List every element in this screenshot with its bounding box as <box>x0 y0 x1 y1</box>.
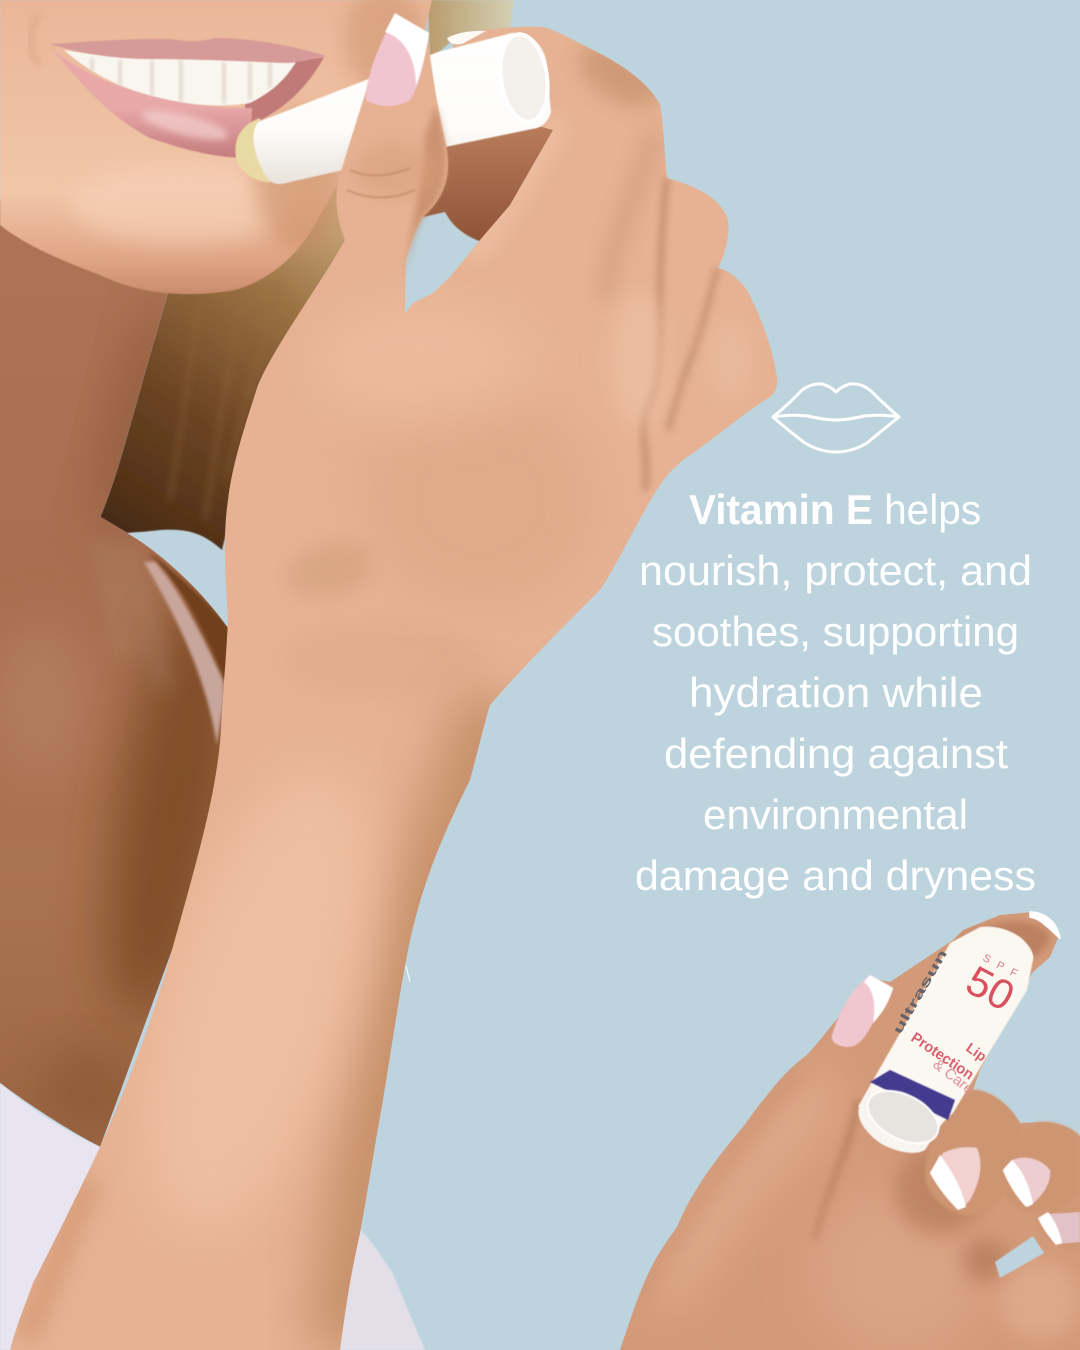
body text: nourish, protect, and <box>639 547 1032 594</box>
smile: lips and teeth <box>50 38 326 158</box>
body text <box>635 486 1036 899</box>
lip balm stick <box>235 31 553 184</box>
ring nail <box>1003 1158 1050 1207</box>
garment strap <box>144 562 224 745</box>
peeking nail behind stick <box>447 31 486 44</box>
SPF stick: ultrasun <box>890 947 950 1036</box>
SPF stick: Lip <box>963 1039 990 1065</box>
body text: hydration while <box>689 669 983 716</box>
middle nail <box>930 1147 980 1208</box>
hand and forearm <box>0 0 800 1350</box>
palm and fingers <box>600 900 1080 1350</box>
index nail <box>832 975 893 1047</box>
finger gap <box>995 1236 1044 1278</box>
icon: lips outline <box>773 384 899 452</box>
body text: damage and dryness <box>635 852 1036 899</box>
forearm shading <box>345 700 500 1350</box>
SPF stick: Protection <box>908 1029 977 1084</box>
ring finger <box>998 1122 1080 1213</box>
nail <box>366 15 428 106</box>
knuckles and finger grooves <box>644 178 667 490</box>
shadow next to the arm <box>82 575 228 1032</box>
body text: environmental <box>703 791 968 838</box>
SPF label text: 50 <box>959 956 1022 1020</box>
garment: white top left <box>0 1083 103 1350</box>
garment: white top right <box>335 1228 425 1350</box>
thumb nail <box>1030 912 1060 938</box>
shoulder skin beside the strap <box>150 553 228 680</box>
little finger <box>1034 1205 1080 1250</box>
hair <box>100 0 514 550</box>
SPF stick <box>858 927 1033 1154</box>
neck and chest <box>0 200 228 1147</box>
face and chin <box>0 0 432 294</box>
index finger over stick <box>336 13 448 280</box>
body text: Vitamin E helps <box>689 486 981 533</box>
SPF stick: & Care <box>930 1056 977 1098</box>
middle finger <box>925 1090 1023 1215</box>
SPF stick: SPF <box>981 952 1026 984</box>
fingers behind the stick <box>423 112 566 245</box>
short white hair strand <box>406 966 410 982</box>
little nail <box>1048 1212 1080 1244</box>
body text: defending against <box>664 730 1008 777</box>
body text: soothes, supporting <box>652 608 1019 655</box>
small hand holding SPF stick <box>600 900 1080 1350</box>
